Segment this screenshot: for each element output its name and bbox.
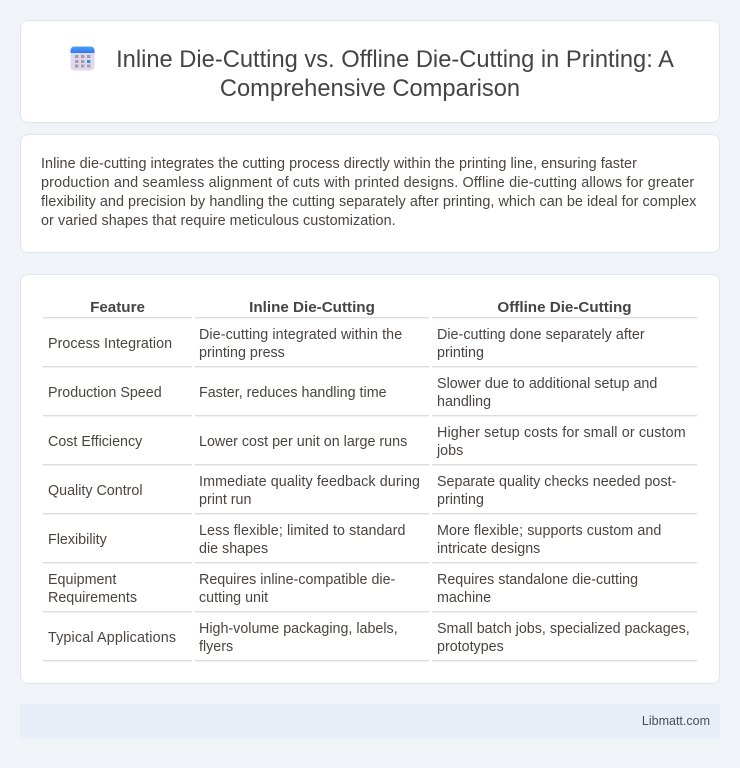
- row: typical applications: Typical Applications: [48, 630, 176, 646]
- row: typical applications: prototypes: [437, 639, 504, 655]
- row: quality control: [48, 474, 676, 508]
- title: [116, 47, 674, 102]
- row: flexibility: Flexibility: [48, 532, 107, 548]
- row: quality control: print run: [199, 492, 251, 508]
- row: cost efficiency: jobs: [437, 443, 463, 459]
- row: equipment requirements: Equipment: [48, 572, 116, 588]
- intro paragraph: Inline die-cutting integrates the cutting process directly within the printing line, ensuring faster: [41, 156, 637, 172]
- intro paragraph: flexibility and precision by handling the cutting separately after printing, which can be ideal for complex: [41, 194, 696, 210]
- row: process integration: printing: [437, 345, 484, 361]
- row: process integration: [48, 327, 645, 361]
- title: Inline Die-Cutting vs. Offline Die-Cutting in Printing: A: [116, 47, 674, 73]
- intro paragraph: production and seamless alignment of cuts with printed designs. Offline die-cutting allows for greater: [41, 175, 694, 191]
- row: cost efficiency: Cost Efficiency: [48, 434, 142, 450]
- comparison table panel: [20, 274, 720, 684]
- row: process integration: Die-cutting integrated within the: [199, 327, 402, 343]
- row: typical applications: High-volume packaging, labels,: [199, 621, 398, 637]
- row: production speed: [48, 376, 657, 410]
- footer bar: [20, 704, 720, 738]
- row: quality control: Separate quality checks needed post-: [437, 474, 676, 490]
- row: equipment requirements: machine: [437, 590, 491, 606]
- row: flexibility: More flexible; supports custom and: [437, 523, 661, 539]
- table header row: Offline Die-Cutting: [497, 299, 632, 316]
- row: cost efficiency: Lower cost per unit on large runs: [199, 434, 407, 450]
- row: flexibility: intricate designs: [437, 541, 540, 557]
- row: production speed: Slower due to additional setup and: [437, 376, 657, 392]
- row: typical applications: Small batch jobs, specialized packages,: [437, 621, 690, 637]
- row: flexibility: Less flexible; limited to standard: [199, 523, 406, 539]
- footer brand text: Libmatt.com: [642, 714, 710, 728]
- icon: calendar: [70, 46, 94, 70]
- row: typical applications: [48, 621, 690, 655]
- intro paragraph: or varied shapes that require meticulous customization.: [41, 213, 396, 229]
- row: typical applications: flyers: [199, 639, 233, 655]
- row: quality control: Quality Control: [48, 483, 143, 499]
- title: Comprehensive Comparison: [220, 76, 520, 102]
- intro paragraph: [41, 156, 696, 229]
- header panel: [20, 20, 720, 123]
- row: equipment requirements: Requirements: [48, 590, 137, 606]
- row: flexibility: die shapes: [199, 541, 268, 557]
- row: equipment requirements: Requires inline-compatible die-: [199, 572, 395, 588]
- row: production speed: Faster, reduces handling time: [199, 385, 387, 401]
- intro text panel: [20, 134, 720, 253]
- table header row: [90, 299, 632, 316]
- row: cost efficiency: [48, 425, 686, 459]
- table header row: Feature: [90, 299, 145, 316]
- row: production speed: Production Speed: [48, 385, 162, 401]
- row: equipment requirements: cutting unit: [199, 590, 268, 606]
- row: process integration: Die-cutting done separately after: [437, 327, 645, 343]
- row: quality control: printing: [437, 492, 484, 508]
- table header row: Inline Die-Cutting: [249, 299, 375, 316]
- row: equipment requirements: [48, 572, 638, 606]
- row: cost efficiency: Higher setup costs for small or custom: [437, 425, 686, 441]
- row: quality control: Immediate quality feedback during: [199, 474, 420, 490]
- row: process integration: Process Integration: [48, 336, 172, 352]
- row: flexibility: [48, 523, 661, 557]
- row: production speed: handling: [437, 394, 491, 410]
- row: process integration: printing press: [199, 345, 285, 361]
- row: equipment requirements: Requires standalone die-cutting: [437, 572, 638, 588]
